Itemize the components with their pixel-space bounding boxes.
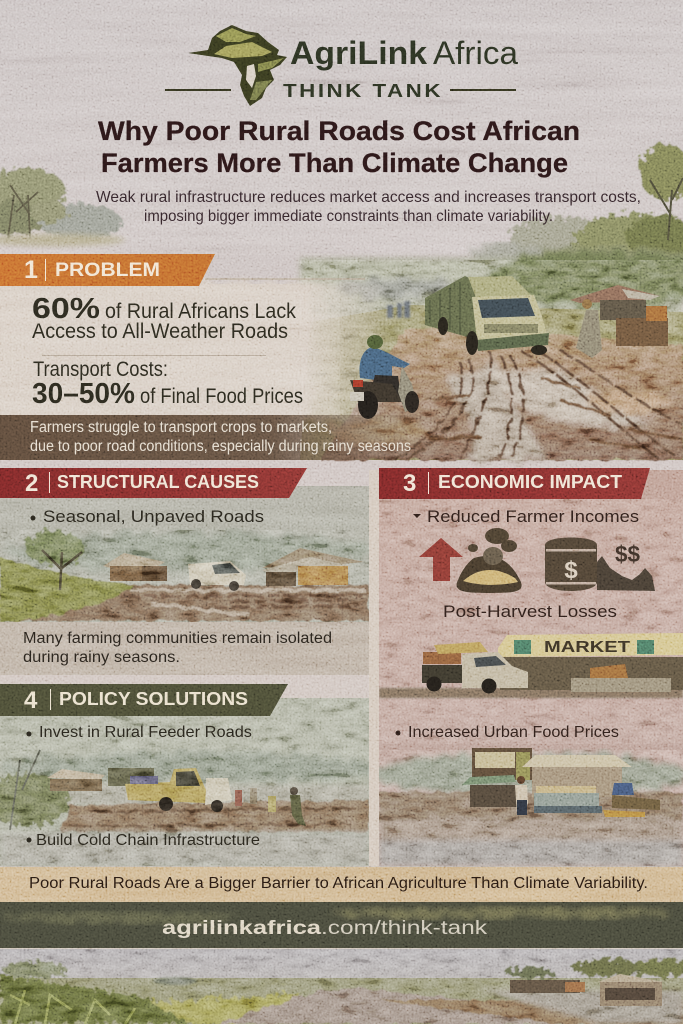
logo bbox=[165, 25, 518, 106]
scene: urban food shops bbox=[370, 748, 683, 866]
scene: top left trees bbox=[0, 168, 125, 246]
section banner: economic impact: 3 bbox=[403, 470, 416, 497]
icon: market building: MARKET bbox=[544, 639, 631, 656]
caption band: due to poor road conditions, especially during rainy seasons bbox=[30, 438, 411, 455]
footer: website bar: agrilinkafrica bbox=[162, 918, 322, 939]
section banner: problem: PROBLEM bbox=[55, 260, 160, 281]
icon: produce stand and people bbox=[515, 776, 660, 817]
scene: people in distance bbox=[387, 301, 410, 318]
icon: dollar signs: $$ bbox=[615, 541, 640, 567]
section banner: problem: 1 bbox=[24, 256, 38, 284]
icon: road workers bbox=[235, 787, 306, 826]
panel: structural causes bbox=[0, 468, 375, 675]
title bbox=[98, 116, 580, 178]
section banner: economic impact: ECONOMIC IMPACT bbox=[438, 472, 622, 492]
section banner: structural causes bbox=[0, 468, 307, 498]
icon: tree shaped like Africa bbox=[188, 25, 287, 106]
icon: left hut bbox=[103, 553, 167, 581]
callout: key message bar bbox=[0, 867, 683, 902]
icon: van bbox=[188, 561, 246, 591]
text: post-harvest losses: Post-Harvest Losses bbox=[443, 602, 617, 621]
icon: rubble bbox=[597, 556, 655, 591]
stat: 60 percent: 60% bbox=[32, 293, 100, 325]
stat: 60 percent: of Rural Africans Lack bbox=[105, 300, 296, 323]
panel: economic impact bbox=[370, 468, 683, 866]
bullet: seasonal roads: Seasonal, Unpaved Roads bbox=[43, 507, 264, 526]
scene: market bbox=[379, 633, 683, 698]
section banner: structural causes: 2 bbox=[25, 470, 38, 497]
text: isolated communities: Many farming communities remain isolated bbox=[23, 630, 332, 647]
stat: transport costs: Transport Costs: bbox=[33, 358, 168, 381]
logo wordmark: AgriLink bbox=[290, 35, 427, 71]
icon: tree bbox=[25, 531, 85, 590]
stat: 60 percent bbox=[32, 293, 296, 343]
section banner: structural causes: STRUCTURAL CAUSES bbox=[57, 472, 259, 492]
text: isolated communities: during rainy seasons. bbox=[23, 649, 180, 666]
callout: key message bar: Poor Rural Roads Are a Bigger Barrier to African Agriculture Than Climate Variability. bbox=[29, 875, 648, 892]
stat: transport costs bbox=[32, 358, 303, 410]
scene: muddy road bbox=[300, 250, 683, 460]
logo tagline: THINK TANK bbox=[283, 81, 443, 101]
bullet: feeder roads: Invest in Rural Feeder Roads bbox=[39, 724, 252, 741]
title: Why Poor Rural Roads Cost African bbox=[98, 116, 580, 146]
section banner: policy solutions: POLICY SOLUTIONS bbox=[59, 689, 248, 709]
icon: market stall with vendor bbox=[570, 285, 668, 358]
section banner: economic impact bbox=[379, 468, 650, 499]
icon: pickup and van bbox=[108, 768, 232, 812]
subtitle: Weak rural infrastructure reduces market access and increases transport costs, bbox=[96, 189, 641, 206]
icon: truck bbox=[425, 276, 549, 355]
icon: dollar barrel bbox=[545, 538, 597, 591]
title: Farmers More Than Climate Change bbox=[101, 148, 568, 178]
bullet: reduced incomes: Reduced Farmer Incomes bbox=[427, 508, 639, 526]
scene: top right trees bbox=[474, 144, 683, 280]
stat: transport costs: of Final Food Prices bbox=[140, 385, 303, 408]
icon: motorcycle rider bbox=[350, 335, 419, 419]
icon: grain sack bbox=[457, 528, 522, 593]
subtitle bbox=[96, 189, 641, 225]
section banner: policy solutions bbox=[0, 684, 288, 716]
stat: transport costs: 30–50% bbox=[32, 378, 135, 410]
scene: isolated community bbox=[0, 530, 375, 622]
icon: market hut bbox=[47, 769, 105, 791]
panel: policy solutions bbox=[0, 684, 380, 866]
caption band: Farmers struggle to transport crops to markets, bbox=[30, 419, 332, 436]
scene: bottom landscape bbox=[0, 949, 683, 1024]
section banner: problem bbox=[0, 254, 215, 286]
bullet: urban food prices: Increased Urban Food Prices bbox=[408, 724, 619, 741]
gap divider bbox=[369, 470, 379, 866]
icon: red arrow bbox=[419, 538, 463, 581]
stat: 60 percent: Access to All-Weather Roads bbox=[32, 320, 288, 343]
icon: dollar barrel: $ bbox=[564, 557, 578, 584]
logo: Africa bbox=[433, 35, 518, 71]
icon: village trees bbox=[505, 959, 683, 979]
bottom text area bbox=[0, 622, 369, 675]
section banner: policy solutions: 4 bbox=[24, 687, 38, 714]
icon: shop buildings bbox=[462, 748, 632, 807]
panel text backdrop bbox=[0, 282, 390, 420]
icon: pickup truck bbox=[422, 642, 528, 694]
text: isolated communities bbox=[23, 630, 332, 666]
footer: website bar bbox=[0, 902, 683, 948]
scene: road building bbox=[0, 698, 380, 866]
caption band bbox=[0, 415, 440, 460]
subtitle: imposing bigger immediate constraints than climate variability. bbox=[144, 208, 553, 225]
panel: problem bbox=[0, 250, 683, 460]
footer: website bar: .com/think-tank bbox=[321, 918, 488, 939]
icon: village huts bbox=[510, 974, 664, 1006]
icon: right hut bbox=[262, 548, 364, 586]
bullet: cold chain: Build Cold Chain Infrastructure bbox=[36, 832, 260, 849]
icon: market building bbox=[498, 633, 683, 692]
